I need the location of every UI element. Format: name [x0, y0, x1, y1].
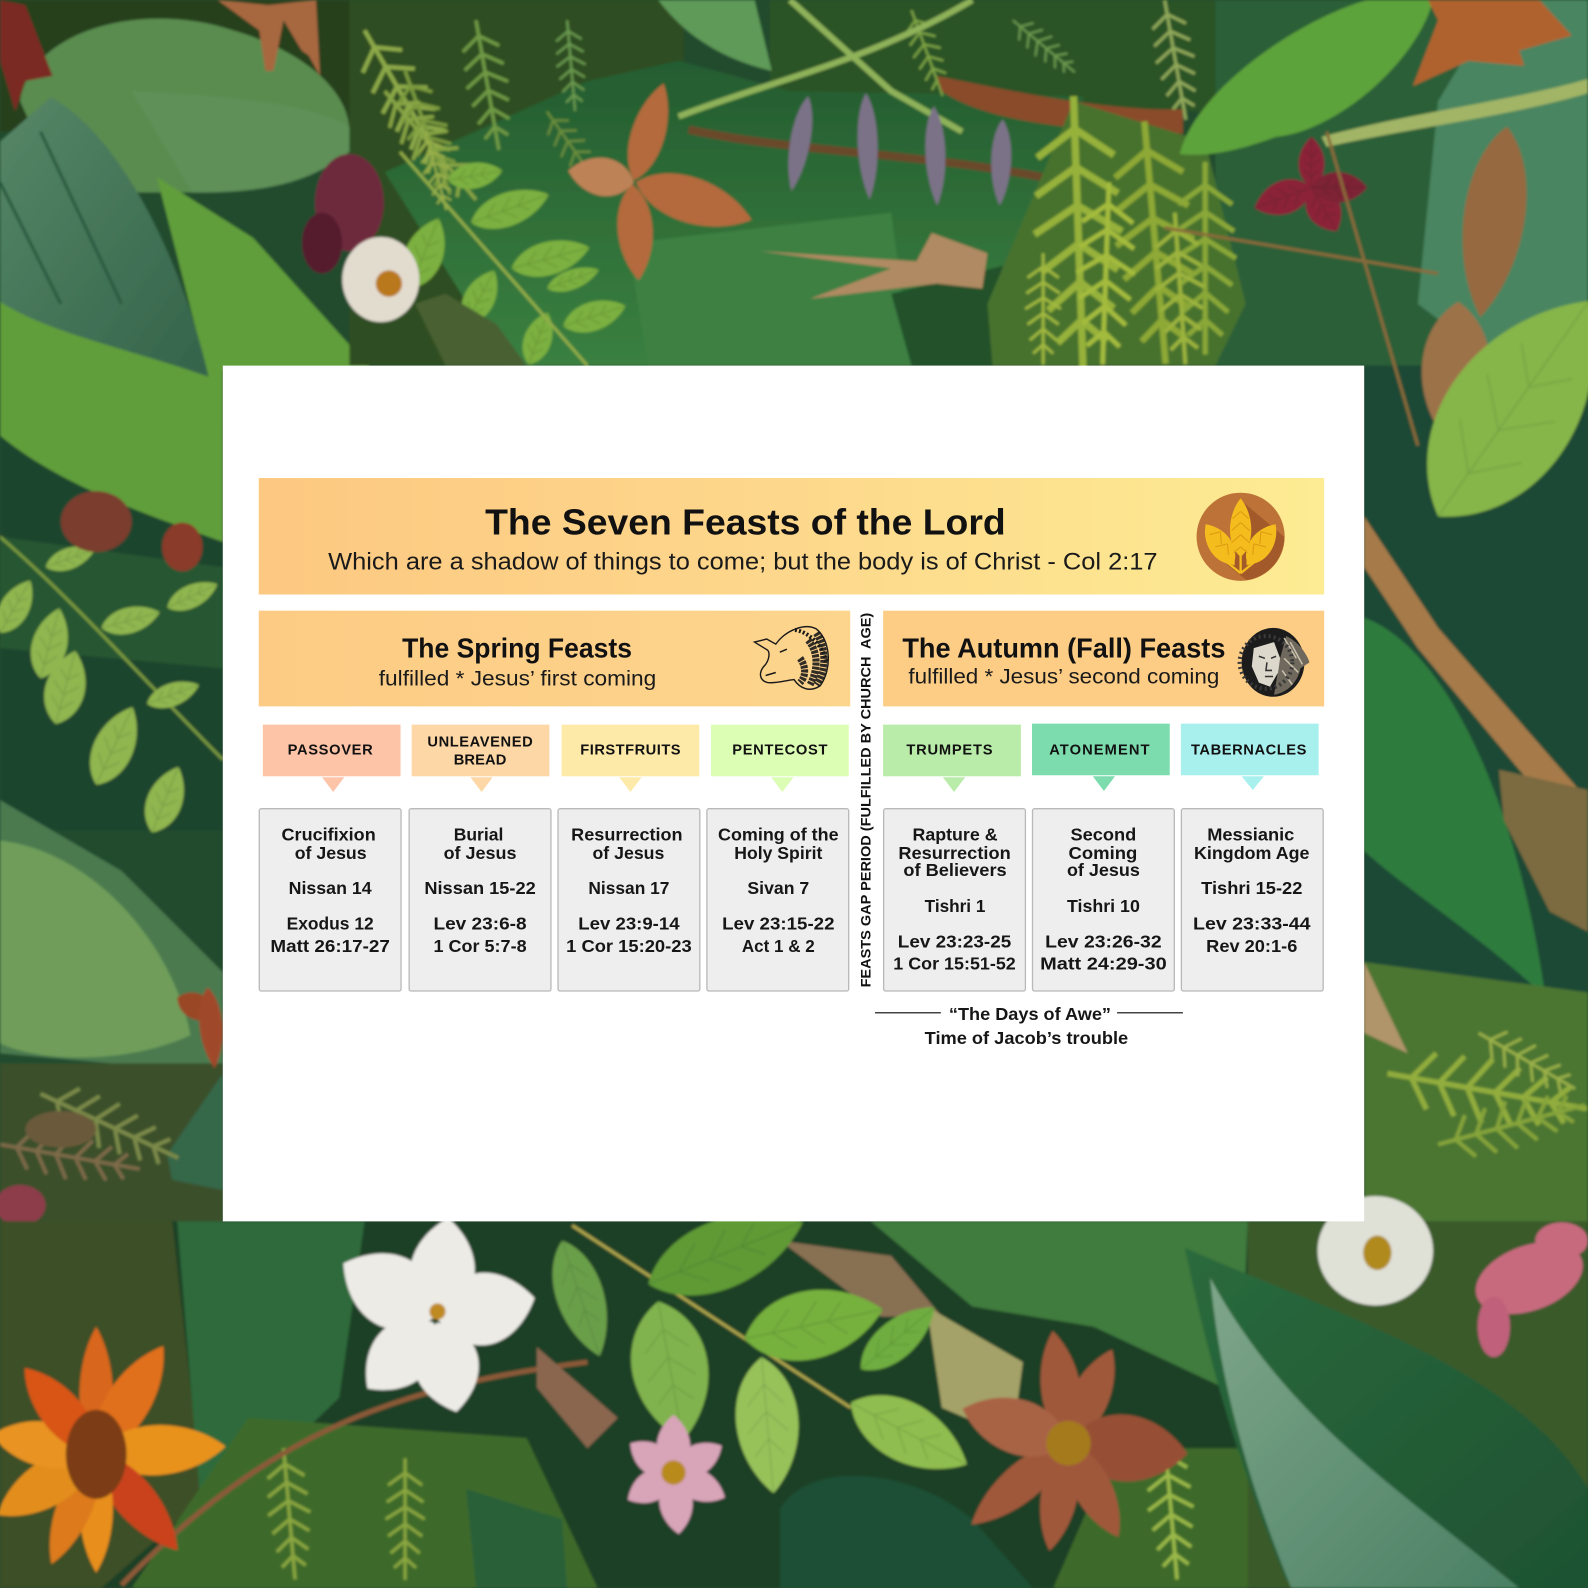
twine knot: [760, 233, 987, 299]
feast tab: pentecost: [711, 725, 849, 792]
icon: orange flower: [0, 1327, 227, 1573]
subheading: autumn: fulfilled * Jesus’ second coming: [908, 665, 1219, 689]
feast tab: unleavened bread: BREAD: [454, 753, 506, 769]
card: pentecost: Holy Spirit: [734, 843, 822, 863]
card: atonement: Second: [1070, 825, 1136, 845]
card: firstfruits: Lev 23:9-14: [578, 914, 680, 934]
large green leaf, bottom right: [1185, 1248, 1588, 1588]
card: pentecost: Coming of the: [718, 825, 839, 845]
card: passover: Exodus 12: [287, 914, 374, 934]
banner: autumn feasts: [883, 611, 1324, 706]
card: passover: Matt 26:17-27: [270, 936, 390, 956]
subtitle: Which are a shadow of things to come; but the body is of Christ - Col 2:17: [328, 549, 1158, 576]
card: tabernacles: Lev 23:33-44: [1193, 914, 1311, 934]
card: passover: Nissan 14: [289, 878, 372, 898]
card: tabernacles: Messianic: [1207, 825, 1294, 845]
card: tabernacles: [1181, 809, 1323, 991]
foliage: bottom background: [0, 1221, 1588, 1588]
icon: brown three-petal flower: [565, 79, 759, 282]
icon: pink flower: [620, 1415, 731, 1536]
card: unleavened bread: of Jesus: [444, 843, 517, 863]
lavender sprigs: [782, 93, 1012, 206]
card: tabernacles: Kingdom Age: [1194, 843, 1310, 863]
heading: autumn: The Autumn (Fall) Feasts: [902, 632, 1225, 663]
card: tabernacles: Rev 20:1-6: [1206, 936, 1297, 956]
feast tab: pentecost: PENTECOST: [732, 743, 827, 759]
icon: daisy and dark flower, top: [302, 154, 527, 366]
feast tab: trumpets: [883, 725, 1021, 792]
foliage: side bands: [0, 0, 1588, 1221]
card: atonement: Coming: [1068, 843, 1137, 863]
heading: title: The Seven Feasts of the Lord: [485, 502, 1006, 543]
icon: lion head: [1240, 628, 1309, 697]
card: trumpets: of Believers: [903, 860, 1007, 880]
vertical label: feasts gap period: FEASTS GAP PERIOD (FULFILLED BY CHURCH AGE): [858, 613, 873, 987]
foliage: yellow-green herb cluster: [987, 95, 1246, 371]
card: unleavened bread: Nissan 15-22: [424, 878, 536, 898]
card: passover: of Jesus: [295, 843, 367, 863]
feast tab: passover: [263, 725, 401, 792]
banner: spring feasts: [259, 611, 850, 706]
icon: wheat badge: [1196, 493, 1285, 587]
icon: lamb head: [755, 627, 828, 689]
card: atonement: [1033, 809, 1174, 991]
foliage: left side sprigs: [0, 491, 223, 839]
card: pentecost: Lev 23:15-22: [722, 914, 835, 934]
card: unleavened bread: Lev 23:6-8: [433, 914, 527, 934]
feast tab: unleavened bread: [412, 725, 549, 792]
callout: days of awe: [875, 1004, 1183, 1048]
feast tab: passover: PASSOVER: [288, 743, 373, 759]
foliage: right side leaves and twig bundle: [1364, 264, 1588, 1221]
icon: white flower: [325, 1215, 542, 1419]
feast tab: trumpets: TRUMPETS: [906, 743, 993, 759]
feast tab: tabernacles: TABERNACLES: [1191, 743, 1307, 759]
card: pentecost: Sivan 7: [747, 878, 809, 898]
feast tab: tabernacles: [1181, 724, 1319, 790]
feast tab: firstfruits: [562, 725, 699, 792]
icon: brown flower, bottom: [954, 1328, 1190, 1554]
card: trumpets: 1 Cor 15:51-52: [893, 954, 1016, 974]
card: firstfruits: Nissan 17: [588, 878, 670, 898]
card: atonement: Lev 23:26-32: [1045, 931, 1162, 951]
card: firstfruits: [558, 809, 700, 991]
icon: daisy and pink cluster, bottom right: [1318, 1196, 1588, 1357]
foliage: bottom large leaves: [466, 1190, 1033, 1588]
white panel: [223, 366, 1364, 1221]
small bright leaves: [393, 152, 630, 369]
card: atonement: of Jesus: [1067, 860, 1140, 880]
card: firstfruits: 1 Cor 15:20-23: [566, 936, 692, 956]
card: pentecost: [707, 809, 849, 991]
card: firstfruits: Resurrection: [571, 825, 683, 845]
card: trumpets: [884, 809, 1025, 991]
callout: days of awe: “The Days of Awe”: [949, 1004, 1111, 1024]
card: pentecost: Act 1 & 2: [742, 936, 815, 956]
feast tab: atonement: ATONEMENT: [1049, 743, 1150, 759]
feast tab: atonement: [1032, 724, 1170, 791]
card: trumpets: Tishri 1: [925, 896, 986, 916]
foliage: top centre ferns and dark leaves: [342, 0, 1215, 366]
card: unleavened bread: 1 Cor 5:7-8: [433, 936, 527, 956]
subheading: spring: fulfilled * Jesus’ first coming: [379, 667, 656, 691]
card: firstfruits: of Jesus: [592, 843, 665, 863]
card: trumpets: Rapture &: [912, 825, 998, 845]
foliage: top-right leaves: [1165, 0, 1588, 450]
card: passover: Crucifixion: [282, 825, 376, 845]
heading: spring: The Spring Feasts: [402, 632, 632, 663]
card: unleavened bread: Burial: [454, 825, 503, 845]
card: atonement: Tishri 10: [1067, 896, 1140, 916]
card: passover: [259, 809, 401, 991]
feast tab: firstfruits: FIRSTFRUITS: [580, 743, 681, 759]
title banner: [259, 478, 1324, 594]
card: atonement: Matt 24:29-30: [1040, 954, 1167, 974]
foliage: left side large leaves: [0, 800, 226, 1225]
card: trumpets: Lev 23:23-25: [898, 931, 1011, 951]
card: tabernacles: Tishri 15-22: [1201, 878, 1303, 898]
callout: days of awe: Time of Jacob’s trouble: [925, 1028, 1128, 1048]
foliage: top-left leaves: [0, 0, 372, 542]
card: trumpets: Resurrection: [898, 843, 1011, 863]
feast tab: unleavened bread: UNLEAVENED: [427, 734, 533, 750]
card: unleavened bread: [409, 809, 551, 991]
